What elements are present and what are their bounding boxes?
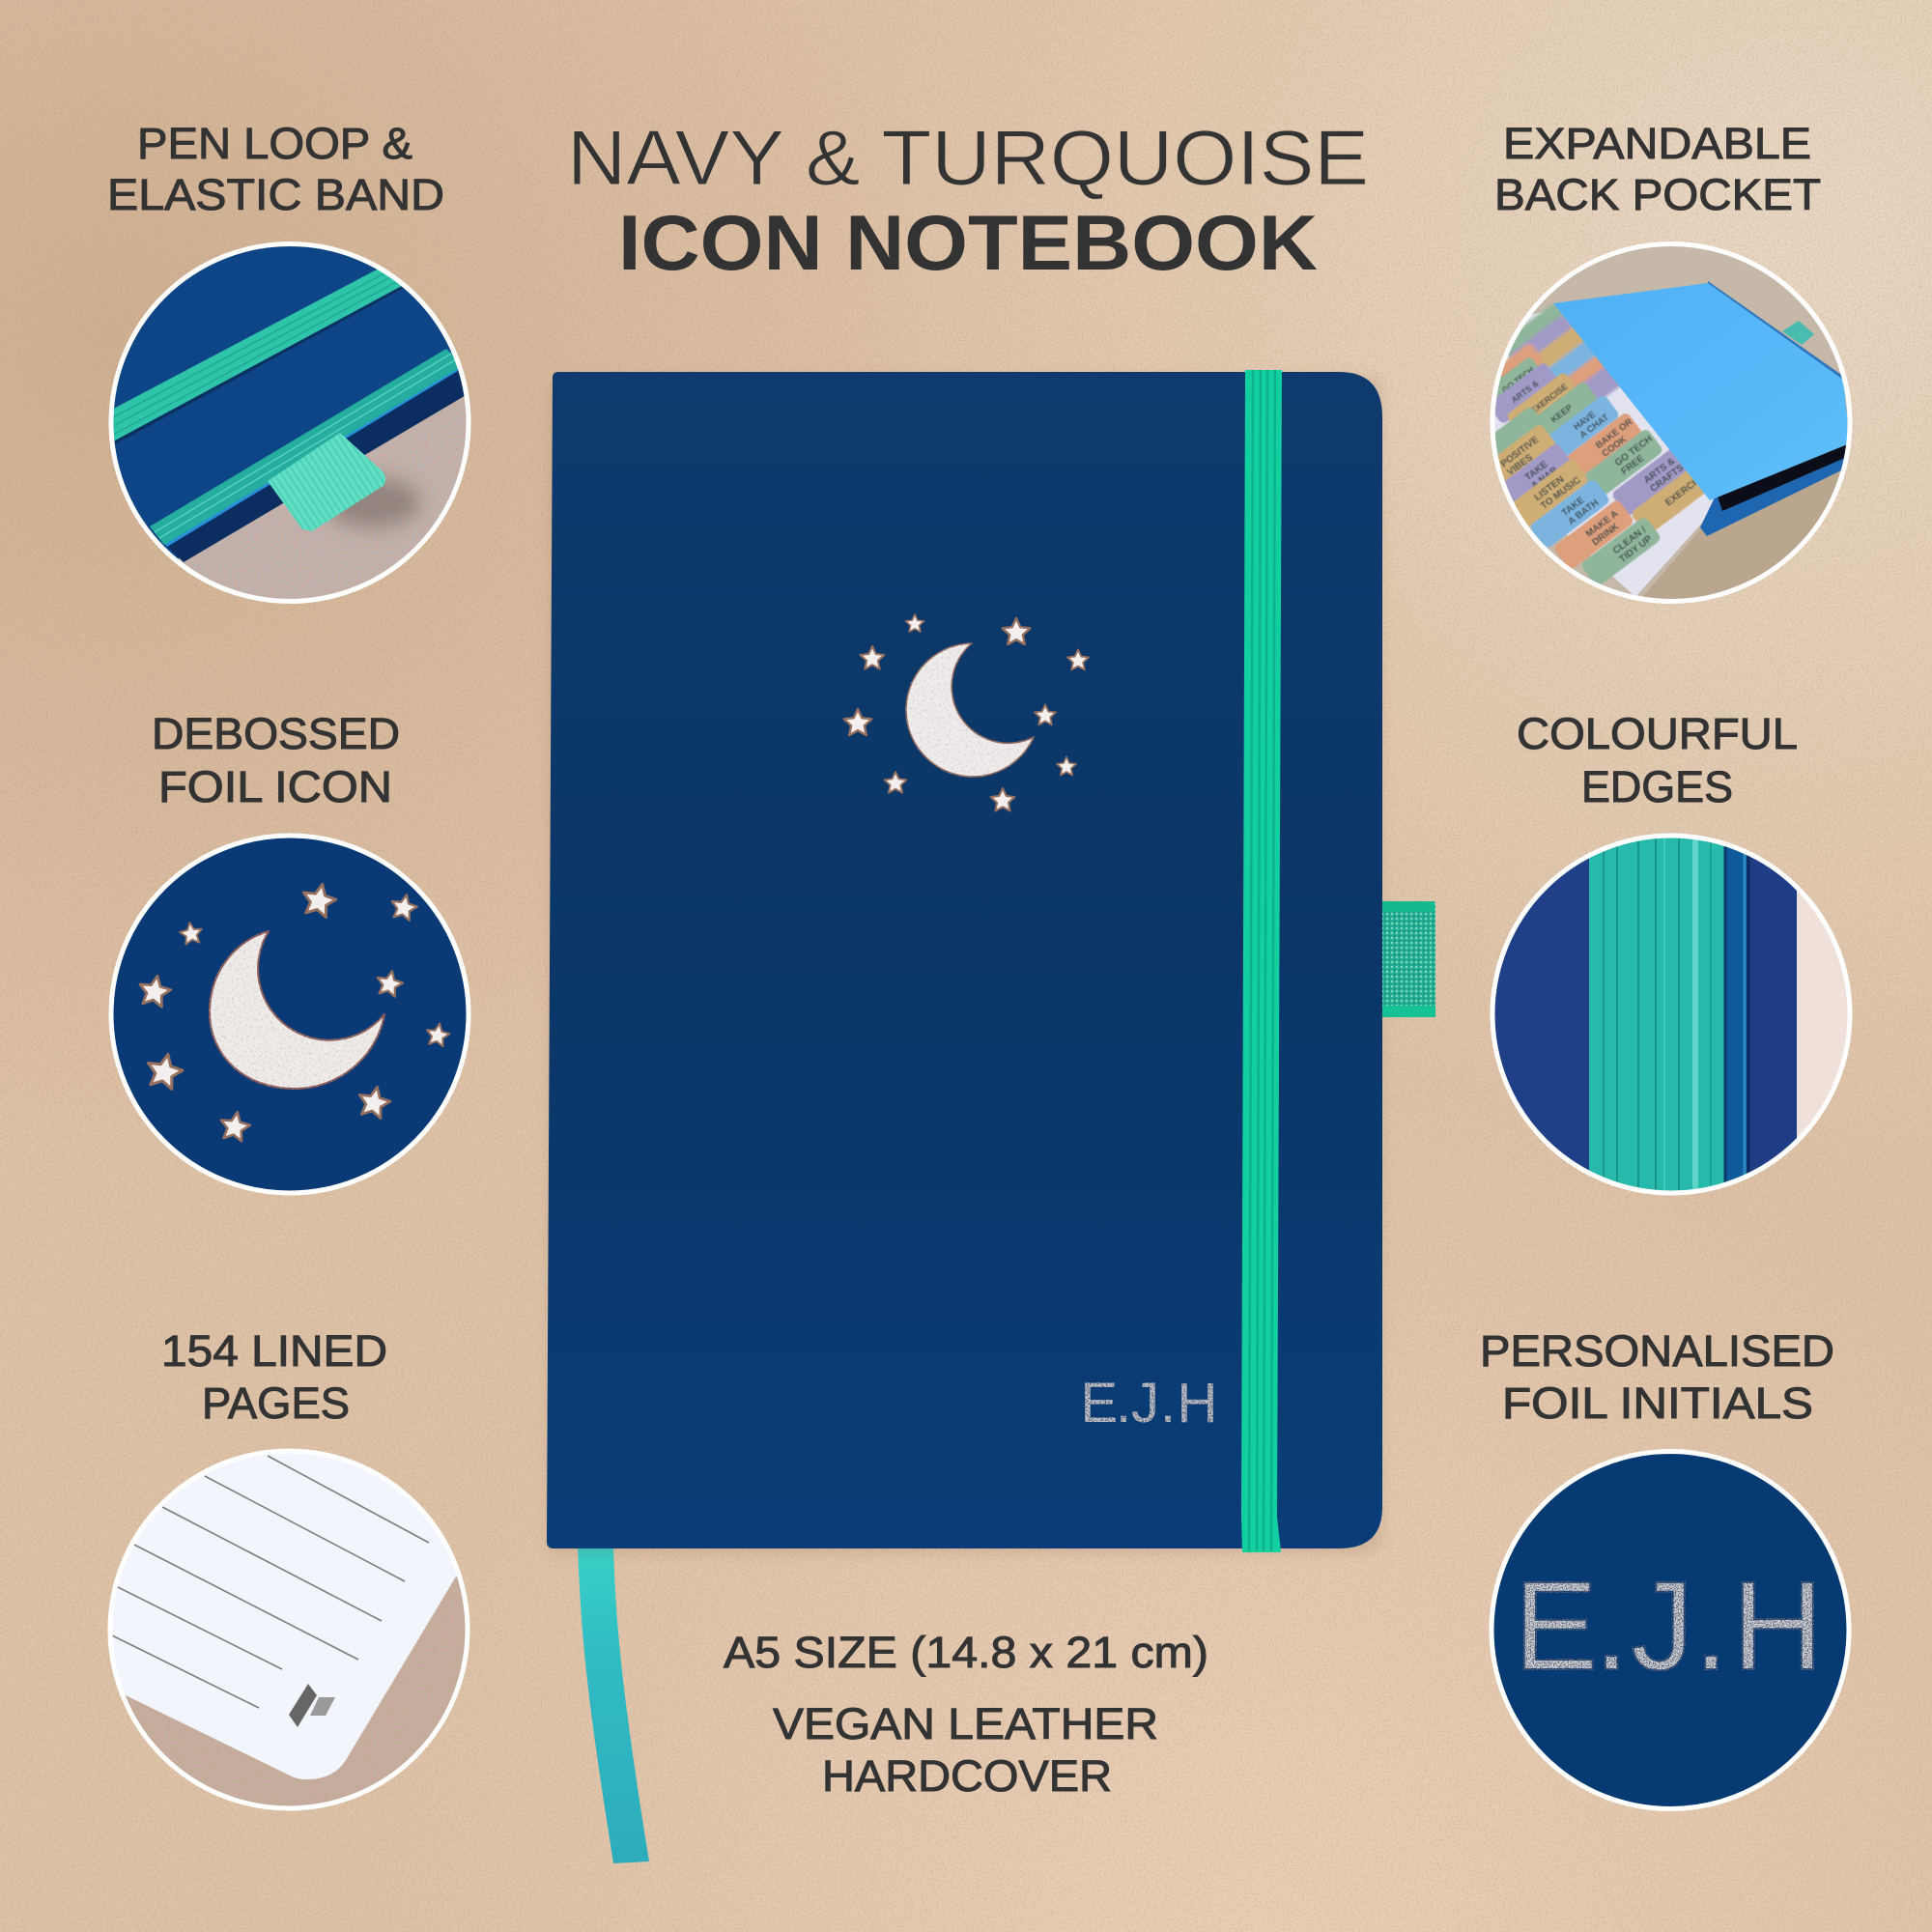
title: NAVY & TURQUOISE bbox=[567, 115, 1369, 202]
photo circle: pen loop bbox=[114, 246, 466, 599]
heading: COLOURFUL bbox=[1517, 709, 1798, 758]
stickers: BAKE OR bbox=[1594, 416, 1634, 451]
white ring bbox=[111, 243, 469, 601]
heading: BACK POCKET bbox=[1494, 170, 1821, 219]
photo circle: back pocket bbox=[1495, 246, 1847, 599]
small pen loop bbox=[1782, 321, 1814, 345]
notebook bbox=[547, 370, 1435, 1863]
elastic band bbox=[1241, 370, 1282, 1552]
size and material text: HARDCOVER bbox=[822, 1751, 1112, 1801]
circle: initials close-up: E.J.H bbox=[1514, 1554, 1824, 1696]
heading: PAGES bbox=[202, 1378, 350, 1428]
stickers: VIBES bbox=[1505, 452, 1535, 478]
heading: EXPANDABLE bbox=[1503, 119, 1811, 168]
heading bbox=[152, 709, 400, 811]
page logo bbox=[289, 1684, 335, 1727]
stickers: CLEAN / bbox=[1611, 525, 1649, 556]
panel: pen loop and elastic band bbox=[104, 119, 483, 618]
circle: moon icon close-up bbox=[111, 836, 469, 1193]
stickers: TO MUSIC bbox=[1539, 475, 1583, 512]
white ring bbox=[1492, 243, 1850, 601]
heading: DEBOSSED bbox=[152, 709, 400, 758]
stickers: DRINK bbox=[1590, 521, 1622, 548]
panel: 154 lined pages bbox=[101, 1326, 478, 1816]
notebook cover bbox=[547, 372, 1382, 1548]
heading: FOIL INITIALS bbox=[1502, 1378, 1813, 1428]
pen loop bbox=[1381, 901, 1435, 1017]
title bbox=[567, 115, 1369, 287]
title: ICON NOTEBOOK bbox=[618, 200, 1318, 287]
heading: ELASTIC BAND bbox=[107, 170, 444, 219]
stickers bbox=[1465, 355, 1715, 587]
heading: 154 LINED bbox=[161, 1326, 387, 1376]
heading: PERSONALISED bbox=[1480, 1326, 1834, 1376]
stickers: EXERCISE bbox=[1663, 470, 1709, 508]
stickers: KEEP bbox=[1549, 403, 1575, 425]
stickers: GO TECH bbox=[1500, 364, 1536, 395]
stickers: TIDY UP bbox=[1617, 533, 1655, 565]
panel: expandable back pocket bbox=[1490, 128, 1853, 604]
loop shadow bbox=[324, 477, 420, 527]
panel: debossed foil icon bbox=[111, 709, 469, 1193]
debossed foil moon and stars icon bbox=[844, 614, 1089, 811]
pen loop tab bbox=[268, 433, 385, 531]
heading bbox=[1480, 1326, 1834, 1428]
heading: PEN LOOP & bbox=[137, 119, 412, 168]
panel: personalised foil initials bbox=[1480, 1326, 1849, 1808]
stickers: EXERCISE bbox=[1528, 382, 1570, 415]
page stripes bbox=[1604, 831, 1748, 1198]
upper band bbox=[104, 269, 402, 446]
inner cover strip bbox=[164, 367, 468, 562]
photo circle: page edges bbox=[1488, 831, 1855, 1198]
heading bbox=[1517, 709, 1798, 811]
floor bbox=[1633, 444, 1860, 609]
ribbon bookmark bbox=[578, 1546, 649, 1863]
far stickers bbox=[1475, 302, 1629, 421]
stickers: HAVE bbox=[1572, 410, 1598, 433]
notebook shadow bbox=[551, 379, 1379, 1552]
stickers: TAKE bbox=[1523, 459, 1550, 483]
heading: EDGES bbox=[1581, 762, 1733, 811]
stickers: CRAFTS bbox=[1648, 463, 1687, 495]
blue cover edge bbox=[1708, 281, 1847, 384]
photo circle: lined page bbox=[101, 1444, 478, 1816]
panel: colourful edges bbox=[1488, 709, 1855, 1198]
white ring bbox=[110, 1451, 468, 1808]
size and material text bbox=[724, 1628, 1208, 1801]
lower band bbox=[150, 349, 464, 545]
stickers: POSITIVE bbox=[1499, 434, 1542, 469]
stickers: LISTEN bbox=[1532, 474, 1566, 503]
blue pocket paper bbox=[1553, 283, 1850, 500]
stickers: A NAP bbox=[1529, 466, 1560, 492]
cover edges bbox=[1700, 446, 1847, 536]
white ring bbox=[1492, 836, 1850, 1193]
size and material text: A5 SIZE (14.8 x 21 cm) bbox=[724, 1628, 1208, 1677]
ruled lines bbox=[112, 1456, 429, 1708]
foil initials on cover: E.J.H bbox=[1080, 1372, 1217, 1435]
heading bbox=[1494, 119, 1821, 219]
heading: FOIL ICON bbox=[158, 762, 392, 811]
floor bbox=[178, 396, 466, 599]
stickers: A CHAT bbox=[1577, 412, 1611, 440]
heading bbox=[107, 119, 444, 219]
stickers: TAKE bbox=[1560, 495, 1587, 519]
stickers: ARTS & bbox=[1510, 378, 1541, 405]
stickers: A BATH bbox=[1566, 497, 1601, 527]
circle: initials close-up bbox=[1492, 1451, 1849, 1808]
size and material text: VEGAN LEATHER bbox=[773, 1699, 1158, 1748]
sticker sheet bbox=[1478, 311, 1729, 597]
stickers: GO TECH bbox=[1613, 434, 1655, 469]
stickers: FREE bbox=[1619, 453, 1647, 477]
stickers: ARTS & bbox=[1642, 456, 1677, 486]
stickers: COOK bbox=[1600, 434, 1629, 460]
stickers: MAKE A bbox=[1584, 508, 1621, 540]
heading bbox=[161, 1326, 387, 1428]
